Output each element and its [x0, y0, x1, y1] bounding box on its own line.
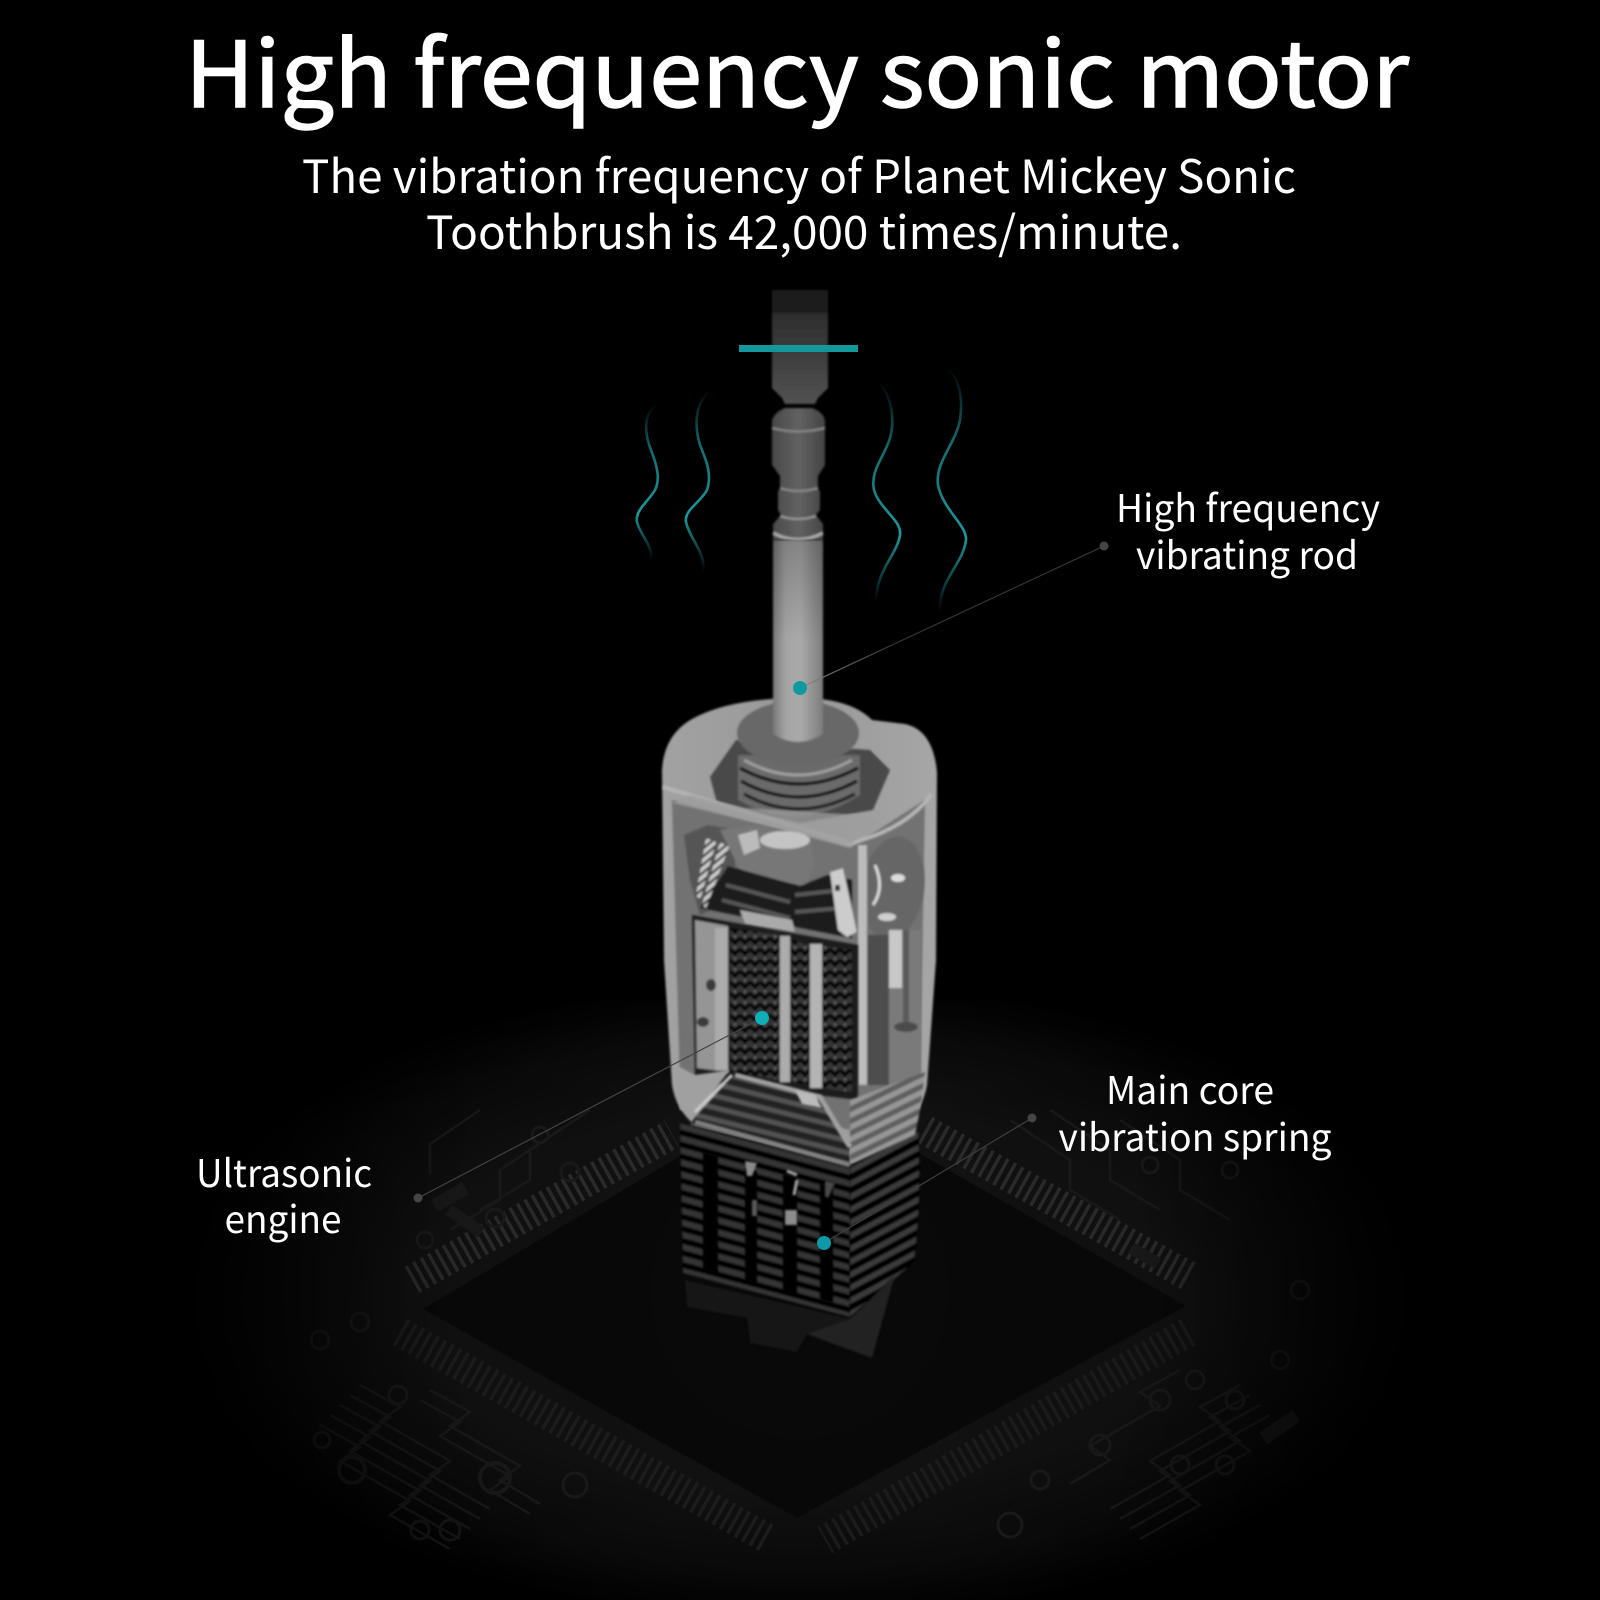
striped lower body: left face — [680, 1123, 850, 1317]
chip pins: lower left — [400, 1332, 770, 1540]
rod shaft — [773, 540, 823, 742]
callout: ultrasonic engine: engine — [224, 1189, 342, 1244]
vibration wave 1 — [637, 405, 658, 560]
callout: high frequency vibrating rod — [793, 478, 1380, 695]
subtitle: The vibration frequency of Planet Mickey Sonic — [302, 141, 1296, 207]
subtitle — [302, 141, 1296, 263]
inner gear cap — [684, 825, 857, 938]
callout: ultrasonic engine — [196, 1011, 769, 1244]
chip pins: upper left — [412, 1134, 672, 1280]
chip pins: lower right — [825, 1332, 1188, 1540]
sonic motor illustration — [662, 290, 937, 1358]
housing inner tone — [672, 800, 925, 1130]
vibrating rod — [772, 290, 828, 540]
infographic canvas — [194, 32, 1410, 1576]
callout: main core vibration spring — [817, 1060, 1332, 1250]
callout: high frequency vibrating rod: High frequency — [1116, 478, 1380, 533]
motor base block — [685, 1275, 895, 1358]
callout: ultrasonic engine: Ultrasonic — [196, 1143, 372, 1198]
chip pins: upper right — [925, 1130, 1192, 1278]
main coil panel — [692, 915, 858, 1100]
slot inserts — [745, 1161, 835, 1225]
callout: high frequency vibrating rod: vibrating rod — [1136, 525, 1358, 580]
flange — [737, 701, 859, 765]
spring stack — [738, 755, 860, 816]
motor housing — [662, 698, 937, 1165]
cyan top marker bar — [739, 345, 858, 352]
chip body — [424, 1154, 1173, 1510]
circuit traces and pads — [311, 1110, 1309, 1549]
striped roof — [690, 1077, 850, 1163]
lower glass ring — [850, 1072, 925, 1165]
upper rim highlight — [663, 787, 932, 843]
vibration wave 3 — [873, 382, 900, 602]
striped lower body: right face — [850, 1130, 919, 1317]
lower corner accents — [676, 1065, 850, 1165]
circuit board background — [310, 1032, 1310, 1576]
small board components — [431, 1182, 1300, 1444]
board surface — [340, 1032, 1260, 1576]
vibration wave 4 — [938, 368, 966, 612]
vertical slots — [703, 1152, 833, 1303]
title: High frequency sonic motor — [185, 2, 1410, 134]
right gear disc — [855, 832, 931, 1085]
callout: main core vibration spring: Main core — [1106, 1060, 1274, 1115]
hexagonal cavity — [710, 740, 890, 823]
vibration wave 2 — [686, 390, 711, 572]
subtitle: Toothbrush is 42,000 times/minute. — [426, 197, 1182, 263]
callout: main core vibration spring: vibration spring — [1058, 1107, 1332, 1162]
